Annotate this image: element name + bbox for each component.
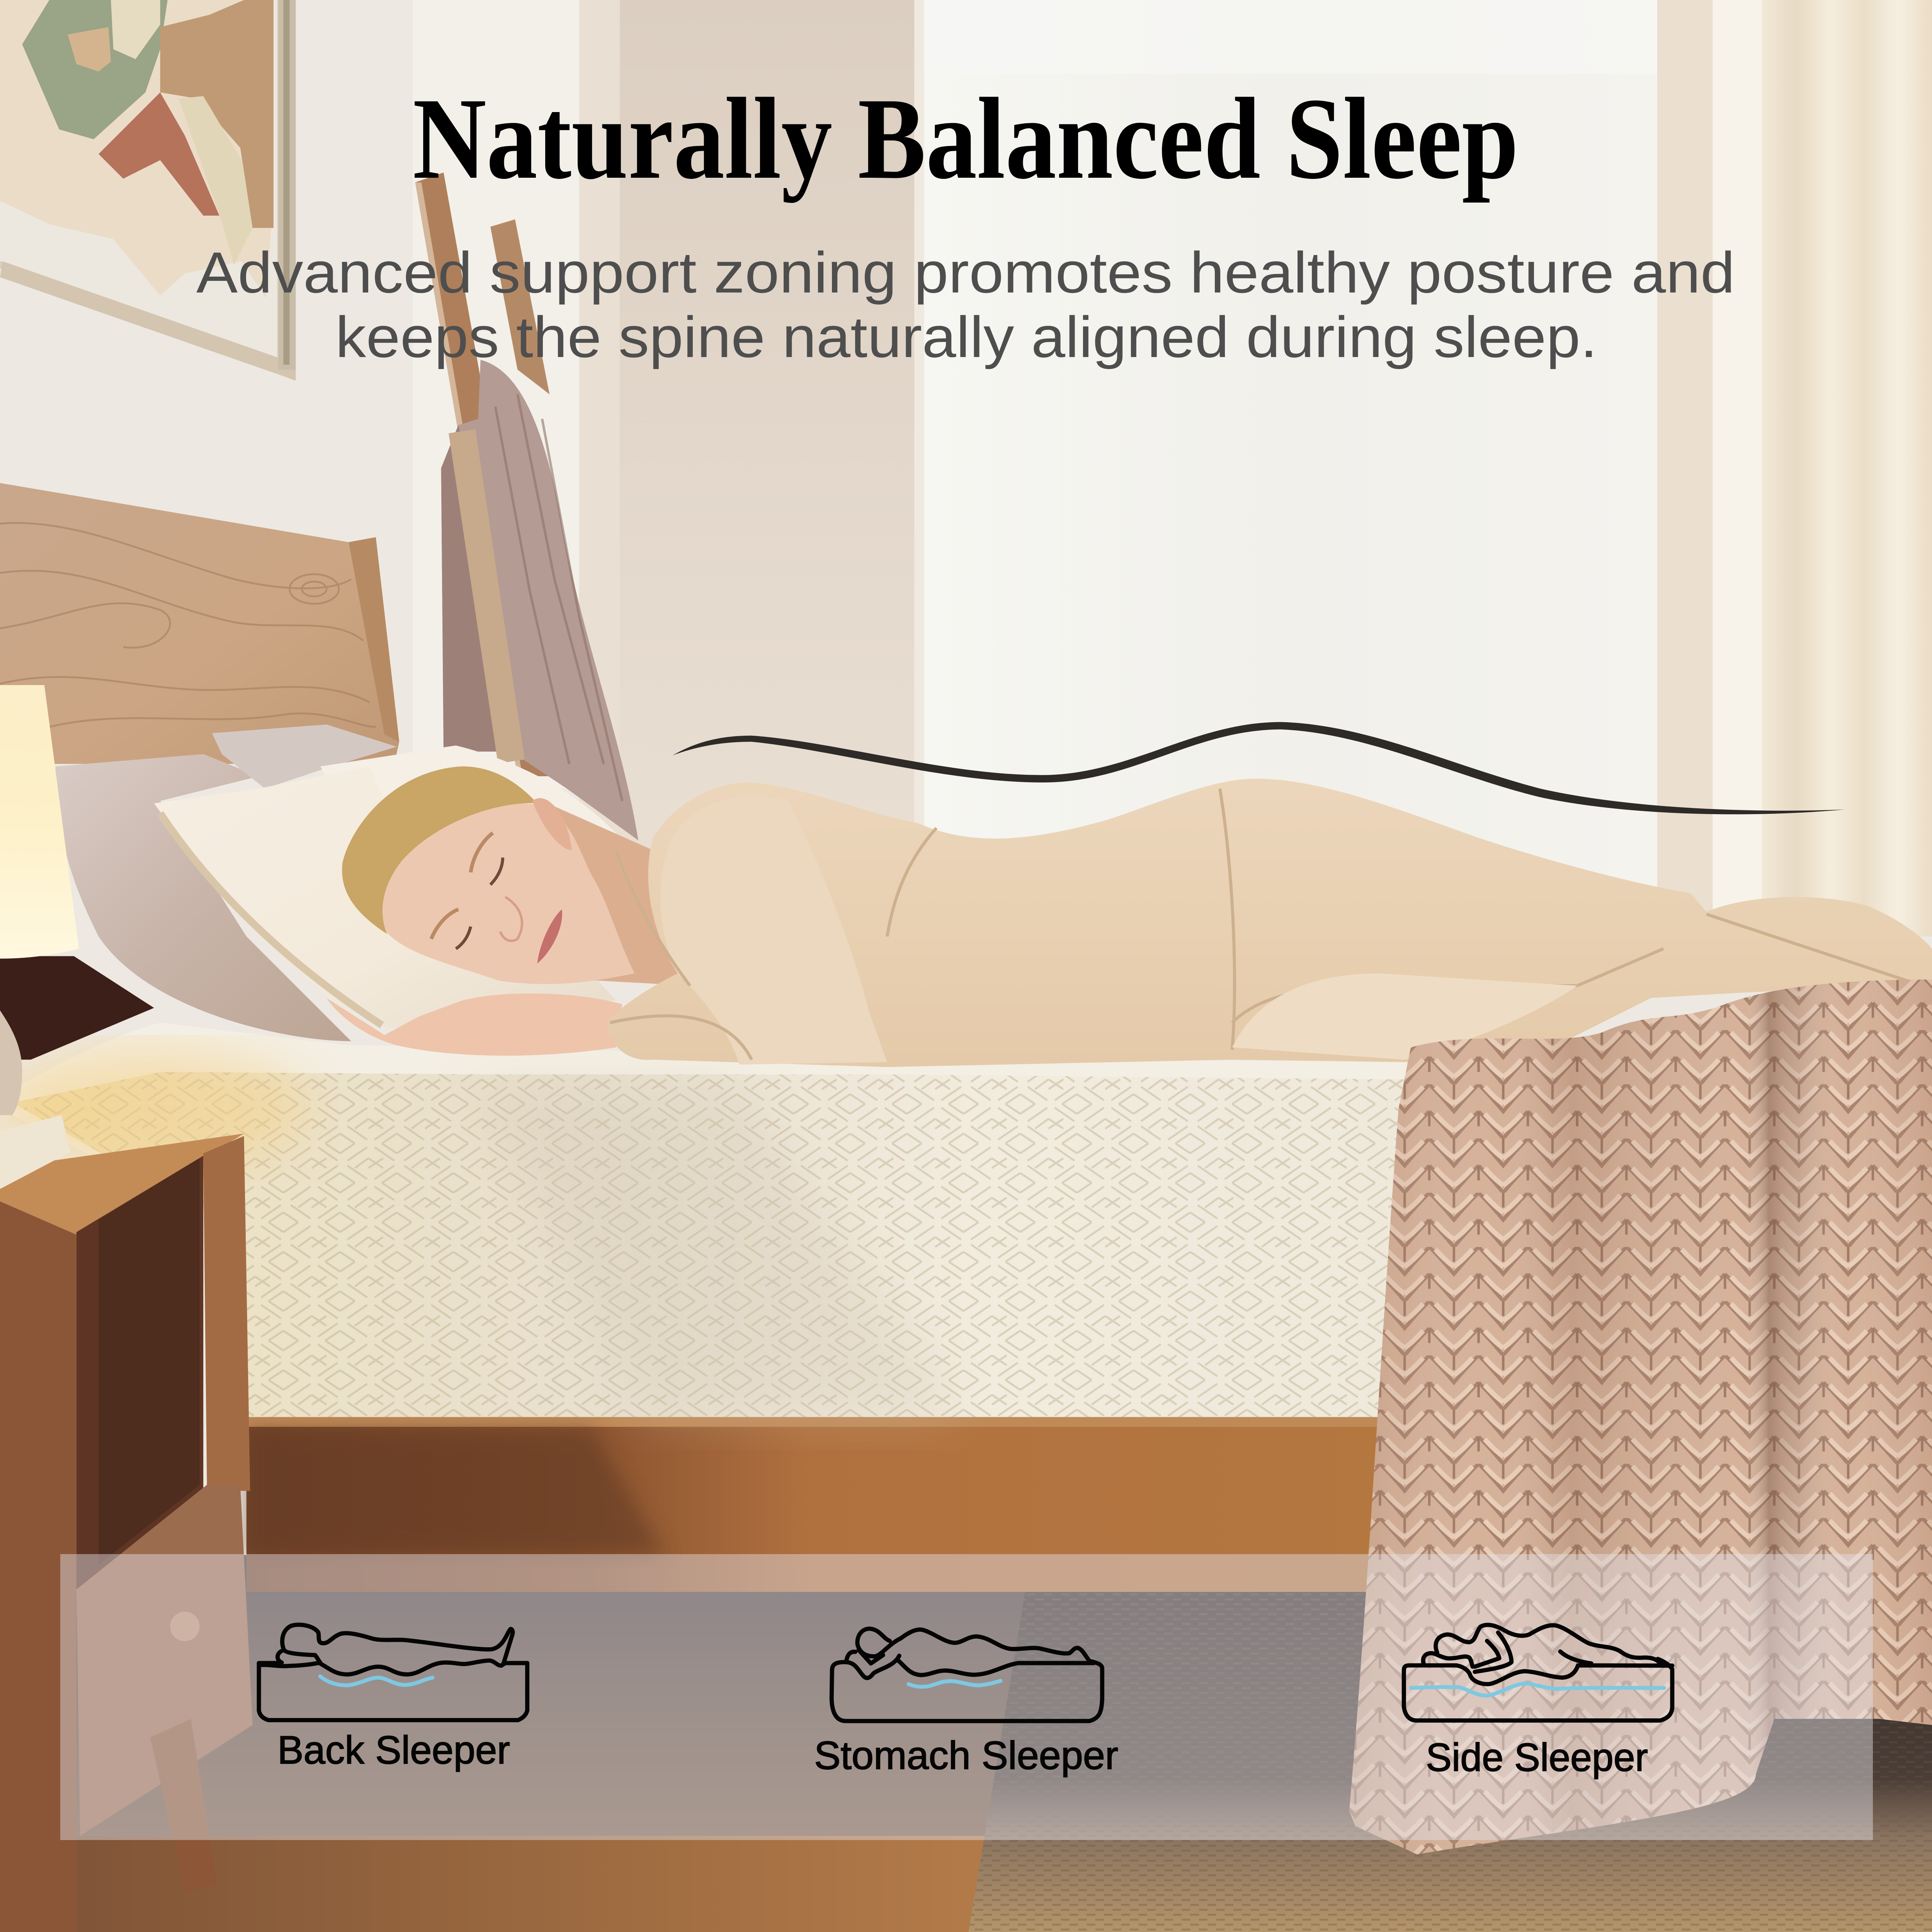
- white upper pillow: [320, 745, 631, 862]
- stomach sleeper group: [814, 1629, 1118, 1777]
- subtitle text block: [196, 240, 1735, 369]
- neck and chest: [542, 801, 690, 986]
- thigh shadow: [1232, 973, 1577, 1060]
- hand: [327, 993, 622, 1056]
- side sleeper group: [1404, 1625, 1672, 1779]
- icon: stomach support wave: [908, 1681, 1001, 1687]
- wooden nightstand: [0, 1134, 253, 1932]
- clothing seams: [610, 789, 1922, 1060]
- lips: [537, 909, 562, 964]
- label: side sleeper: Side Sleeper: [1426, 1735, 1648, 1779]
- back sleeper group: [259, 1625, 527, 1772]
- torso and legs in beige pajamas: [606, 779, 1932, 1067]
- label: back sleeper: Back Sleeper: [277, 1728, 510, 1772]
- wooden bed frame: [247, 1417, 1378, 1592]
- title: Naturally Balanced Sleep: [413, 74, 1519, 203]
- closed eyes: [456, 857, 503, 949]
- subtitle text block: keeps the spine naturally aligned during sleep.: [335, 304, 1597, 369]
- rear small pillow: [212, 724, 397, 789]
- nose: [500, 897, 522, 941]
- icon: side support wave: [1411, 1684, 1664, 1696]
- book on nightstand: [0, 1115, 70, 1189]
- icon: stomach sleeper: [832, 1629, 1102, 1721]
- face: [381, 803, 634, 984]
- framed textile artwork: [0, 0, 296, 381]
- hair: [342, 766, 537, 934]
- icon: back support wave: [320, 1676, 432, 1685]
- back pillow: [55, 754, 351, 1041]
- ear: [532, 798, 572, 850]
- subtitle text block: Advanced support zoning promotes healthy posture and: [196, 240, 1735, 305]
- label: stomach sleeper: Stomach Sleeper: [814, 1733, 1118, 1777]
- woven mattress: [0, 1023, 1407, 1417]
- icon: side sleeper: [1404, 1625, 1672, 1721]
- sleeping woman: [327, 766, 1932, 1067]
- translucent sleeper panel: [60, 1554, 1873, 1840]
- main cream pillow: [154, 766, 616, 1029]
- sleeve: [660, 796, 887, 1065]
- wooden headboard: [0, 483, 399, 764]
- dark shadow behind lamp: [0, 956, 154, 1060]
- knitted blanket: [1349, 980, 1932, 1854]
- icon: back sleeper: [259, 1625, 527, 1720]
- draped mauve throw: [441, 360, 638, 840]
- floor and rug: [0, 1555, 1932, 1932]
- spine alignment curve: [673, 722, 1845, 814]
- eyebrows: [431, 833, 493, 939]
- pillow piping: [160, 813, 382, 1025]
- leaning wooden ladder: [415, 172, 552, 776]
- table lamp: [0, 685, 79, 1115]
